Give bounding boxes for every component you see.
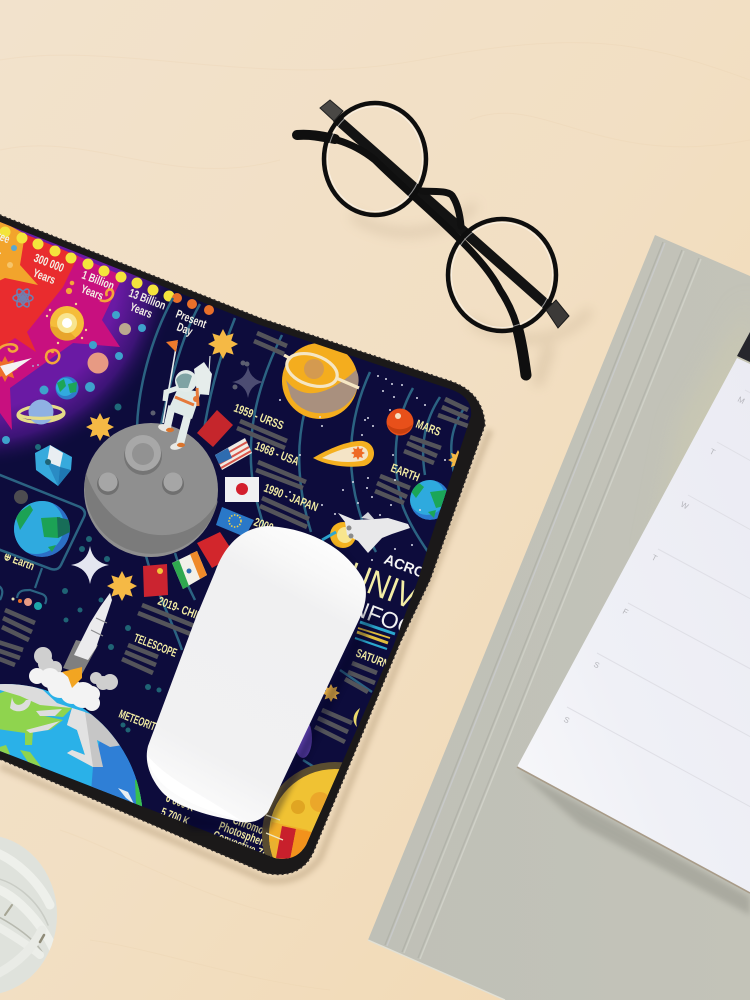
small planets in purple region: [2, 311, 146, 450]
mouse pad stitched border: [0, 213, 485, 874]
timeline labels: METEORITE: [117, 708, 162, 736]
teal orbit lines: [137, 298, 463, 772]
mars: [386, 408, 414, 436]
timeline labels: ⊕ Earth: [2, 550, 36, 574]
age labels: 1 Billion: [80, 269, 116, 293]
gray folder: [368, 235, 750, 1000]
notepad: S: [562, 715, 571, 725]
timeline labels: 5 700 K: [159, 806, 191, 829]
edge dots: [0, 226, 214, 315]
temple tip right: [518, 330, 526, 375]
sun cutaway: [260, 762, 410, 915]
notepad: T: [650, 553, 659, 563]
title block: [342, 552, 515, 678]
timeline labels: 1968 - USA: [253, 439, 301, 469]
notepad: S: [592, 660, 601, 670]
rocket: [63, 593, 112, 674]
age labels: Years: [31, 267, 57, 288]
title block: ACROSS THE: [382, 552, 476, 601]
moon: [84, 423, 218, 557]
timeline labels: [2, 401, 442, 865]
age labels: Years: [128, 301, 154, 322]
white mouse: [147, 526, 366, 822]
notepad: W: [679, 500, 690, 512]
atom icon: [13, 287, 33, 309]
timeline labels: 1959 - URSS: [232, 401, 285, 433]
small spirals and dots: [0, 282, 113, 363]
mouse pad shadow: [0, 430, 490, 881]
astronaut: [157, 356, 212, 451]
teal dots: [45, 360, 250, 732]
temple tip left: [297, 135, 335, 139]
white star specks: [279, 375, 446, 561]
timeline labels: 6 000 K: [164, 792, 196, 815]
notepad: M: [736, 395, 746, 406]
bridge: [422, 191, 461, 226]
timeline labels: 1990 - JAPAN: [262, 481, 320, 515]
gem: [35, 445, 72, 486]
white cloud streaks: [67, 708, 93, 767]
notepad shadow: [517, 770, 750, 915]
title block: INFOGRAPHICS: [342, 591, 515, 678]
age labels: [0, 226, 208, 339]
rubber band ball: [0, 835, 57, 995]
timeline labels: EARTH: [389, 462, 421, 485]
earth right: [410, 480, 447, 520]
left lens inner rim: [328, 106, 422, 212]
age labels: 300 000: [32, 252, 66, 275]
green land: [0, 688, 72, 745]
mouse shadow: [170, 530, 375, 830]
red burst: [0, 234, 78, 352]
glasses: [296, 100, 569, 375]
launch clouds: [29, 647, 118, 711]
timeline labels: TELESCOPE: [132, 632, 179, 661]
gold stars and sparkles: [71, 329, 468, 702]
orange burst: [0, 215, 38, 285]
left lens: [324, 103, 426, 215]
purple planet: [294, 718, 312, 758]
right hinge: [546, 300, 569, 328]
moon flag: [163, 340, 178, 423]
notepad: F: [621, 607, 630, 617]
left hinge: [320, 100, 343, 121]
age labels: Years: [79, 283, 105, 304]
solar system branch: [0, 568, 46, 610]
saturn: [18, 400, 64, 424]
comet: [313, 441, 374, 467]
white wisp: [118, 788, 134, 804]
right lens inner rim: [452, 222, 552, 328]
purple cosmic glow: [0, 222, 167, 456]
yellow crescent: [354, 708, 360, 727]
mouse pad artwork: [0, 222, 472, 859]
age labels: 13 Billion: [127, 287, 167, 313]
right lens: [448, 219, 556, 331]
timeline labels: Chromosphere: [231, 814, 291, 848]
title block: UNIVERSE: [342, 555, 498, 646]
notepad: T: [708, 447, 717, 457]
age labels: Present: [174, 308, 208, 332]
age labels: Day: [175, 321, 194, 339]
timeline labels: Convective Zone: [211, 829, 278, 865]
timeline labels: 2019- CHINA: [156, 594, 211, 626]
timeline labels: MARS: [414, 418, 442, 439]
timeline labels: Photosphere: [217, 820, 269, 851]
small earth: [56, 376, 78, 400]
thick temple arm: [338, 120, 548, 306]
magenta burst: [0, 244, 120, 430]
space shuttle: [322, 512, 410, 553]
notepad: [517, 332, 750, 893]
green sliver: [135, 780, 142, 806]
big earth: [0, 684, 142, 806]
thin temple arm: [296, 135, 519, 335]
timeline labels: SATURN: [354, 647, 390, 672]
glasses shadow: [352, 205, 590, 385]
gray text bars: [0, 333, 468, 742]
shooting star: [0, 356, 39, 382]
gray cloud cap: [0, 683, 72, 708]
dark ocean: [92, 742, 142, 806]
rocket flame: [62, 667, 82, 688]
orange burst details: [7, 245, 17, 268]
earth info box: [0, 473, 85, 570]
galaxy: [46, 303, 87, 344]
ringed planet: [282, 343, 359, 419]
timeline labels: 2000: [252, 515, 275, 535]
mission flags: [143, 410, 259, 597]
gray cloud right: [67, 708, 123, 767]
